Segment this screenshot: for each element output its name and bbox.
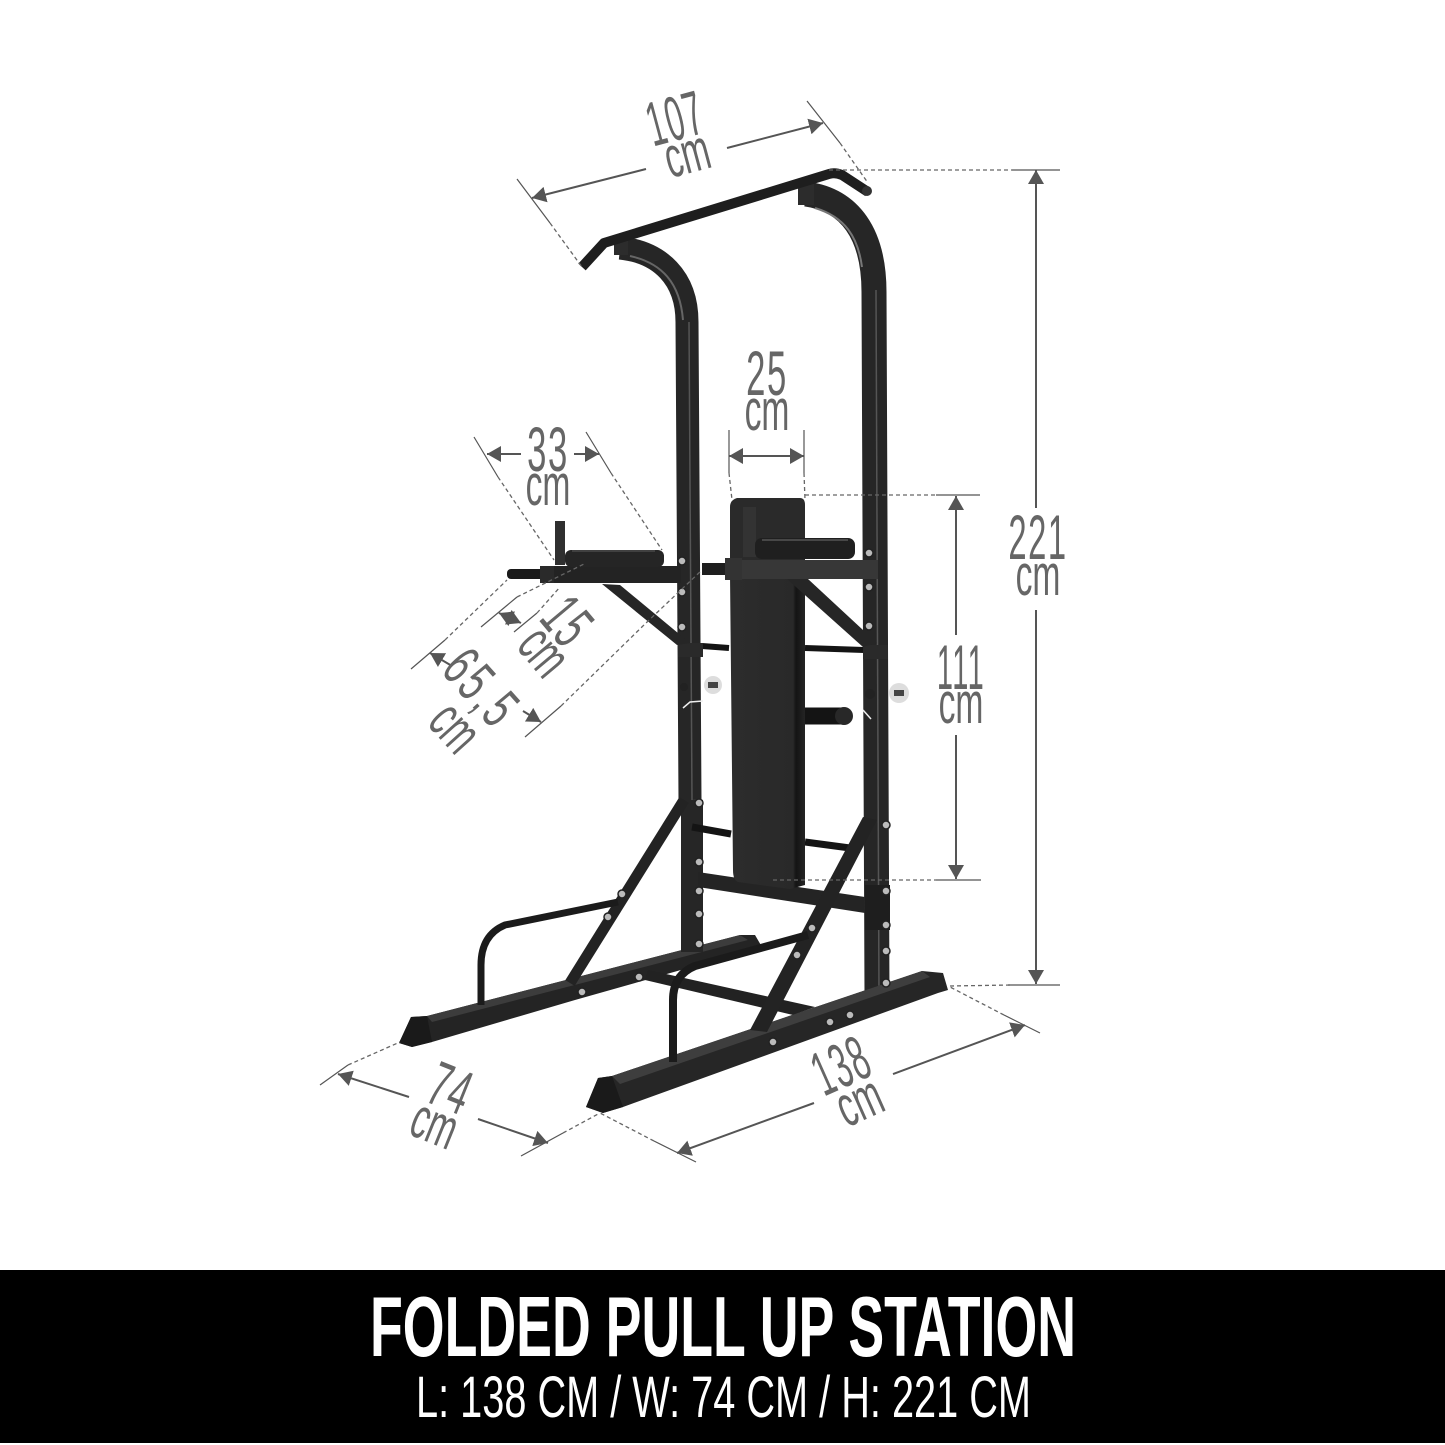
upright: left — [614, 238, 703, 800]
dimension: bench length 111 cm: 111 — [937, 634, 985, 703]
rear foot — [399, 935, 762, 1047]
machine: pull up station — [399, 173, 948, 1113]
dimension: arm pad depth 33 cm: cm — [526, 454, 570, 518]
dip arms and pads — [507, 507, 878, 647]
dimension: arm length 65,5 cm — [411, 570, 702, 766]
dimension: grip gap 15 cm: 15 — [527, 582, 608, 660]
dimension: pull up bar width 107 cm: 107 — [638, 77, 712, 160]
dimension: pull up bar width 107 cm — [517, 77, 868, 267]
dimension: arm length 65,5 cm: 65,5 — [430, 636, 533, 741]
dimension: pull up bar width 107 cm: cm — [657, 117, 717, 191]
dimension: arm pad depth 33 cm — [474, 414, 662, 560]
back pad and bench — [730, 498, 805, 889]
dimension: width 74 cm: 74 — [418, 1048, 484, 1129]
rear post and lower crossbars — [645, 646, 865, 1015]
dimension: height 221 cm — [829, 170, 1068, 986]
dimension: height 221 cm: cm — [1016, 544, 1060, 608]
dimension: width 74 cm — [320, 1042, 600, 1163]
dimension: length 138 cm: 138 — [801, 1021, 882, 1109]
dimension: back pad width 25 cm: cm — [745, 379, 789, 443]
knobs — [680, 676, 909, 719]
front foot — [586, 971, 948, 1113]
dimension: width 74 cm: cm — [402, 1086, 467, 1163]
banner — [0, 1270, 1445, 1443]
dimension: bench length 111 cm: cm — [939, 672, 983, 736]
dimension: length 138 cm: cm — [826, 1063, 893, 1140]
dimension: back pad width 25 cm: 25 — [746, 338, 788, 409]
upright: right — [798, 183, 890, 995]
side braces and dip handles — [481, 800, 877, 1062]
dimension: bench length 111 cm — [773, 495, 985, 880]
dimension: grip gap 15 cm — [481, 563, 608, 689]
dimension: length 138 cm — [600, 987, 1040, 1162]
dimension: grip gap 15 cm: cm — [505, 613, 583, 689]
dimension: arm length 65,5 cm: cm — [416, 689, 494, 766]
dimension: height 221 cm: 221 — [1008, 503, 1068, 573]
top pull up bar with handles — [582, 173, 872, 267]
dimension: arm pad depth 33 cm: 33 — [527, 414, 569, 485]
dimension: back pad width 25 cm — [729, 338, 805, 500]
bolts — [578, 549, 890, 1046]
subtitle: overall dimensions: L: 138 CM / W: 74 CM / H: 221 CM — [416, 1365, 1031, 1430]
rear peg — [805, 707, 853, 725]
